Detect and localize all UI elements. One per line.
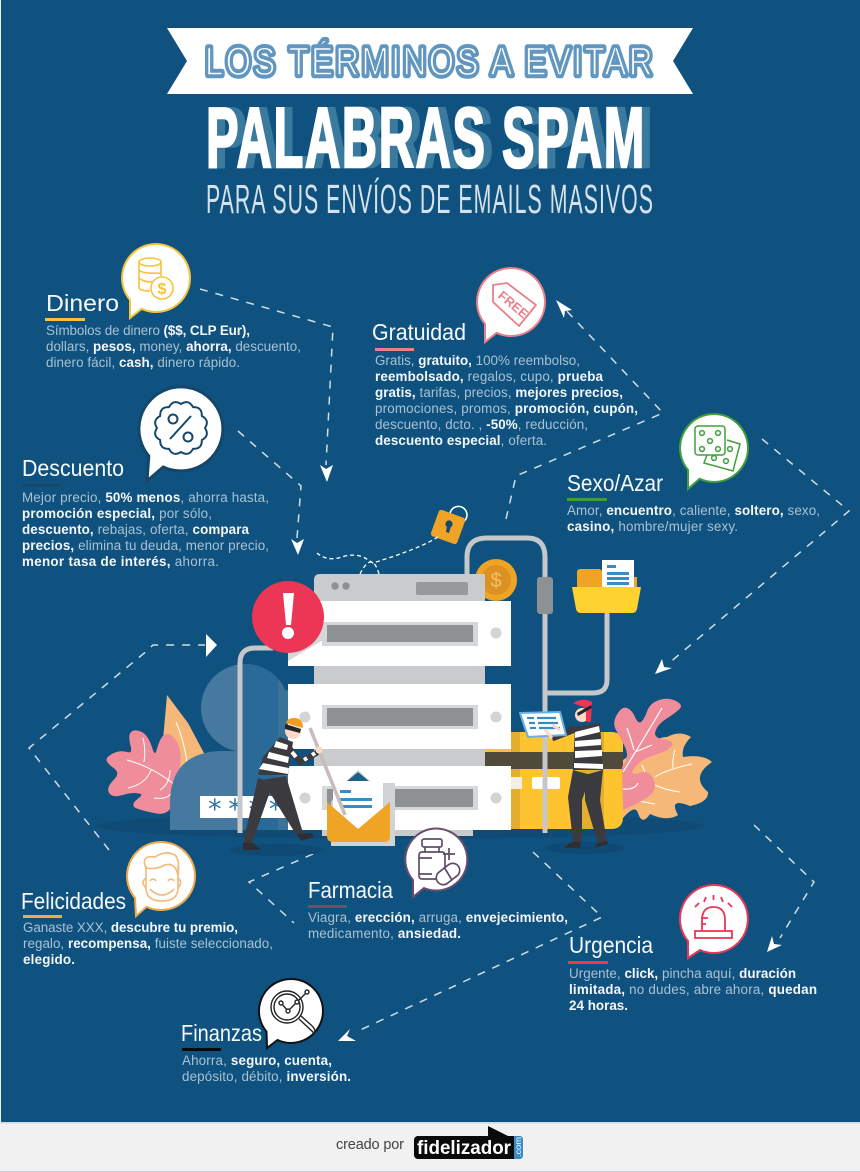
panel: Urgencia <box>568 885 817 1013</box>
text: Descuento terms: Mejor precio, 50% menos, ahorra hasta, <box>22 490 269 505</box>
icon: medicine speech bubble <box>405 829 467 897</box>
arrow: server to gratuidad <box>506 300 663 519</box>
icon: free tag speech bubble: FREE <box>495 288 532 322</box>
text: Sexo/Azar terms: casino, hombre/mujer sexy. <box>567 519 738 534</box>
heading: Gratuidad: Gratuidad <box>372 319 466 345</box>
folder <box>572 560 641 613</box>
title banner: LOS TÉRMINOS A EVITAR <box>205 39 655 84</box>
icon: coins speech bubble <box>122 244 190 318</box>
text: Finanzas terms <box>182 1053 351 1084</box>
creado por label: creado por <box>336 1137 404 1153</box>
text: Descuento terms: descuento, rebajas, oferta, compara <box>22 522 250 537</box>
text: Descuento terms: precios, elimina tu deuda, menor precio, <box>22 538 269 553</box>
panel: Felicidades <box>21 842 273 967</box>
text: Dinero terms <box>46 323 301 370</box>
text: Gratuidad terms: Gratis, gratuito, 100% reembolso, <box>375 353 580 368</box>
arrow: server to finanzas <box>338 852 602 1041</box>
leaf group right <box>614 699 712 820</box>
central illustration: server and thieves <box>95 506 712 856</box>
panel: Finanzas <box>181 979 351 1084</box>
footer <box>0 1122 860 1172</box>
text: Dinero terms: Símbolos de dinero ($$, CLP Eur), <box>46 323 250 338</box>
heading: Urgencia: Urgencia <box>569 932 653 958</box>
text: Sexo/Azar terms <box>567 503 820 534</box>
arrow: felicidades to server <box>29 634 217 850</box>
dashed lock cable <box>317 537 438 574</box>
coin: $ <box>490 570 502 592</box>
alert circle <box>252 581 324 653</box>
icon: coins speech bubble: $ <box>158 281 167 298</box>
title banner <box>167 28 693 94</box>
icon: dice speech bubble <box>680 414 748 489</box>
icon: free tag speech bubble <box>477 268 545 342</box>
panel: Sexo/Azar <box>567 414 820 534</box>
text: Descuento terms: menor tasa de interés, ahorra. <box>22 554 219 569</box>
coin <box>475 559 517 601</box>
arrow: server to farmacia <box>249 854 313 923</box>
logo: fidelizador: fidelizador <box>417 1138 512 1159</box>
wires <box>240 538 545 833</box>
text: Farmacia terms <box>308 910 568 941</box>
text: Gratuidad terms: descuento especial, oferta. <box>375 433 547 448</box>
arrow: urgencia <box>754 825 814 952</box>
text: Gratuidad terms: descuento, dcto. , -50%, reducción, <box>375 417 588 432</box>
logo: fidelizador: .com <box>514 1137 523 1157</box>
logo: fidelizador <box>414 1126 523 1159</box>
person silhouette <box>170 660 289 830</box>
text: Gratuidad terms: promociones, promos, promoción, cupón, <box>375 401 638 416</box>
panel: Dinero <box>45 244 301 370</box>
password box: ***** <box>208 794 310 825</box>
heading: Descuento: Descuento <box>22 455 124 481</box>
text: Gratuidad terms: gratis, tarifas, precios, mejores precios, <box>375 385 623 400</box>
thief left <box>230 718 345 856</box>
title banner: LOS TÉRMINOS A EVITAR <box>205 39 655 84</box>
text: Farmacia terms: medicamento, ansiedad. <box>308 926 461 941</box>
heading: Finanzas: Finanzas <box>181 1020 262 1046</box>
text: Descuento terms <box>22 490 269 569</box>
text: Gratuidad terms <box>375 353 638 448</box>
icon: smiling face speech bubble <box>127 842 195 916</box>
icon: percent badge speech bubble <box>139 387 223 481</box>
padlock <box>430 506 467 545</box>
heading: Farmacia: Farmacia <box>308 877 393 903</box>
text: Felicidades terms: elegido. <box>23 952 75 967</box>
text: Farmacia terms: Viagra, erección, arruga, envejecimiento, <box>308 910 568 925</box>
right wire and connector <box>537 577 607 833</box>
arrow: descuento to server <box>238 431 304 555</box>
arrow: dinero to server <box>200 289 333 482</box>
text: Felicidades terms: Ganaste XXX, descubre tu premio, <box>23 920 238 935</box>
text: Gratuidad terms: reembolsado, regalos, cupo, prueba <box>375 369 604 384</box>
credit card <box>485 732 623 829</box>
icon: magnifier chart speech bubble <box>259 979 323 1048</box>
server <box>288 574 511 836</box>
text: Dinero terms: dollars, pesos, money, ahorra, descuento, <box>46 339 301 354</box>
text: Dinero terms: dinero fácil, cash, dinero rápido. <box>46 355 240 370</box>
ground shadow <box>95 813 705 839</box>
text: Felicidades terms <box>23 920 273 967</box>
envelope <box>327 770 395 846</box>
panel: Descuento <box>22 387 269 569</box>
panel: Gratuidad <box>372 268 638 448</box>
text: Descuento terms: promoción especial, por sólo, <box>22 506 212 521</box>
text: Urgencia terms: Urgente, click, pincha aquí, duración <box>569 966 796 981</box>
text: Urgencia terms <box>569 966 817 1013</box>
heading: Felicidades: Felicidades <box>21 888 126 914</box>
text: Finanzas terms: depósito, débito, inversión. <box>182 1069 351 1084</box>
heading: Sexo/Azar: Sexo/Azar <box>567 470 663 496</box>
text: Finanzas terms: Ahorra, seguro, cuenta, <box>182 1053 332 1068</box>
leaf group left <box>107 695 205 813</box>
text: Felicidades terms: regalo, recompensa, fuiste seleccionado, <box>23 936 273 951</box>
text: Urgencia terms: 24 horas. <box>569 998 628 1013</box>
text: Urgencia terms: limitada, no dudes, abre ahora, quedan <box>569 982 817 997</box>
thief right <box>520 700 625 854</box>
heading: Dinero: Dinero <box>46 290 119 316</box>
arrow: sexo to server <box>655 439 849 674</box>
panel: Farmacia <box>308 829 568 941</box>
text: Sexo/Azar terms: Amor, encuentro, caliente, soltero, sexo, <box>567 503 820 518</box>
main heading <box>206 91 654 186</box>
icon: alarm beacon speech bubble <box>680 885 748 958</box>
